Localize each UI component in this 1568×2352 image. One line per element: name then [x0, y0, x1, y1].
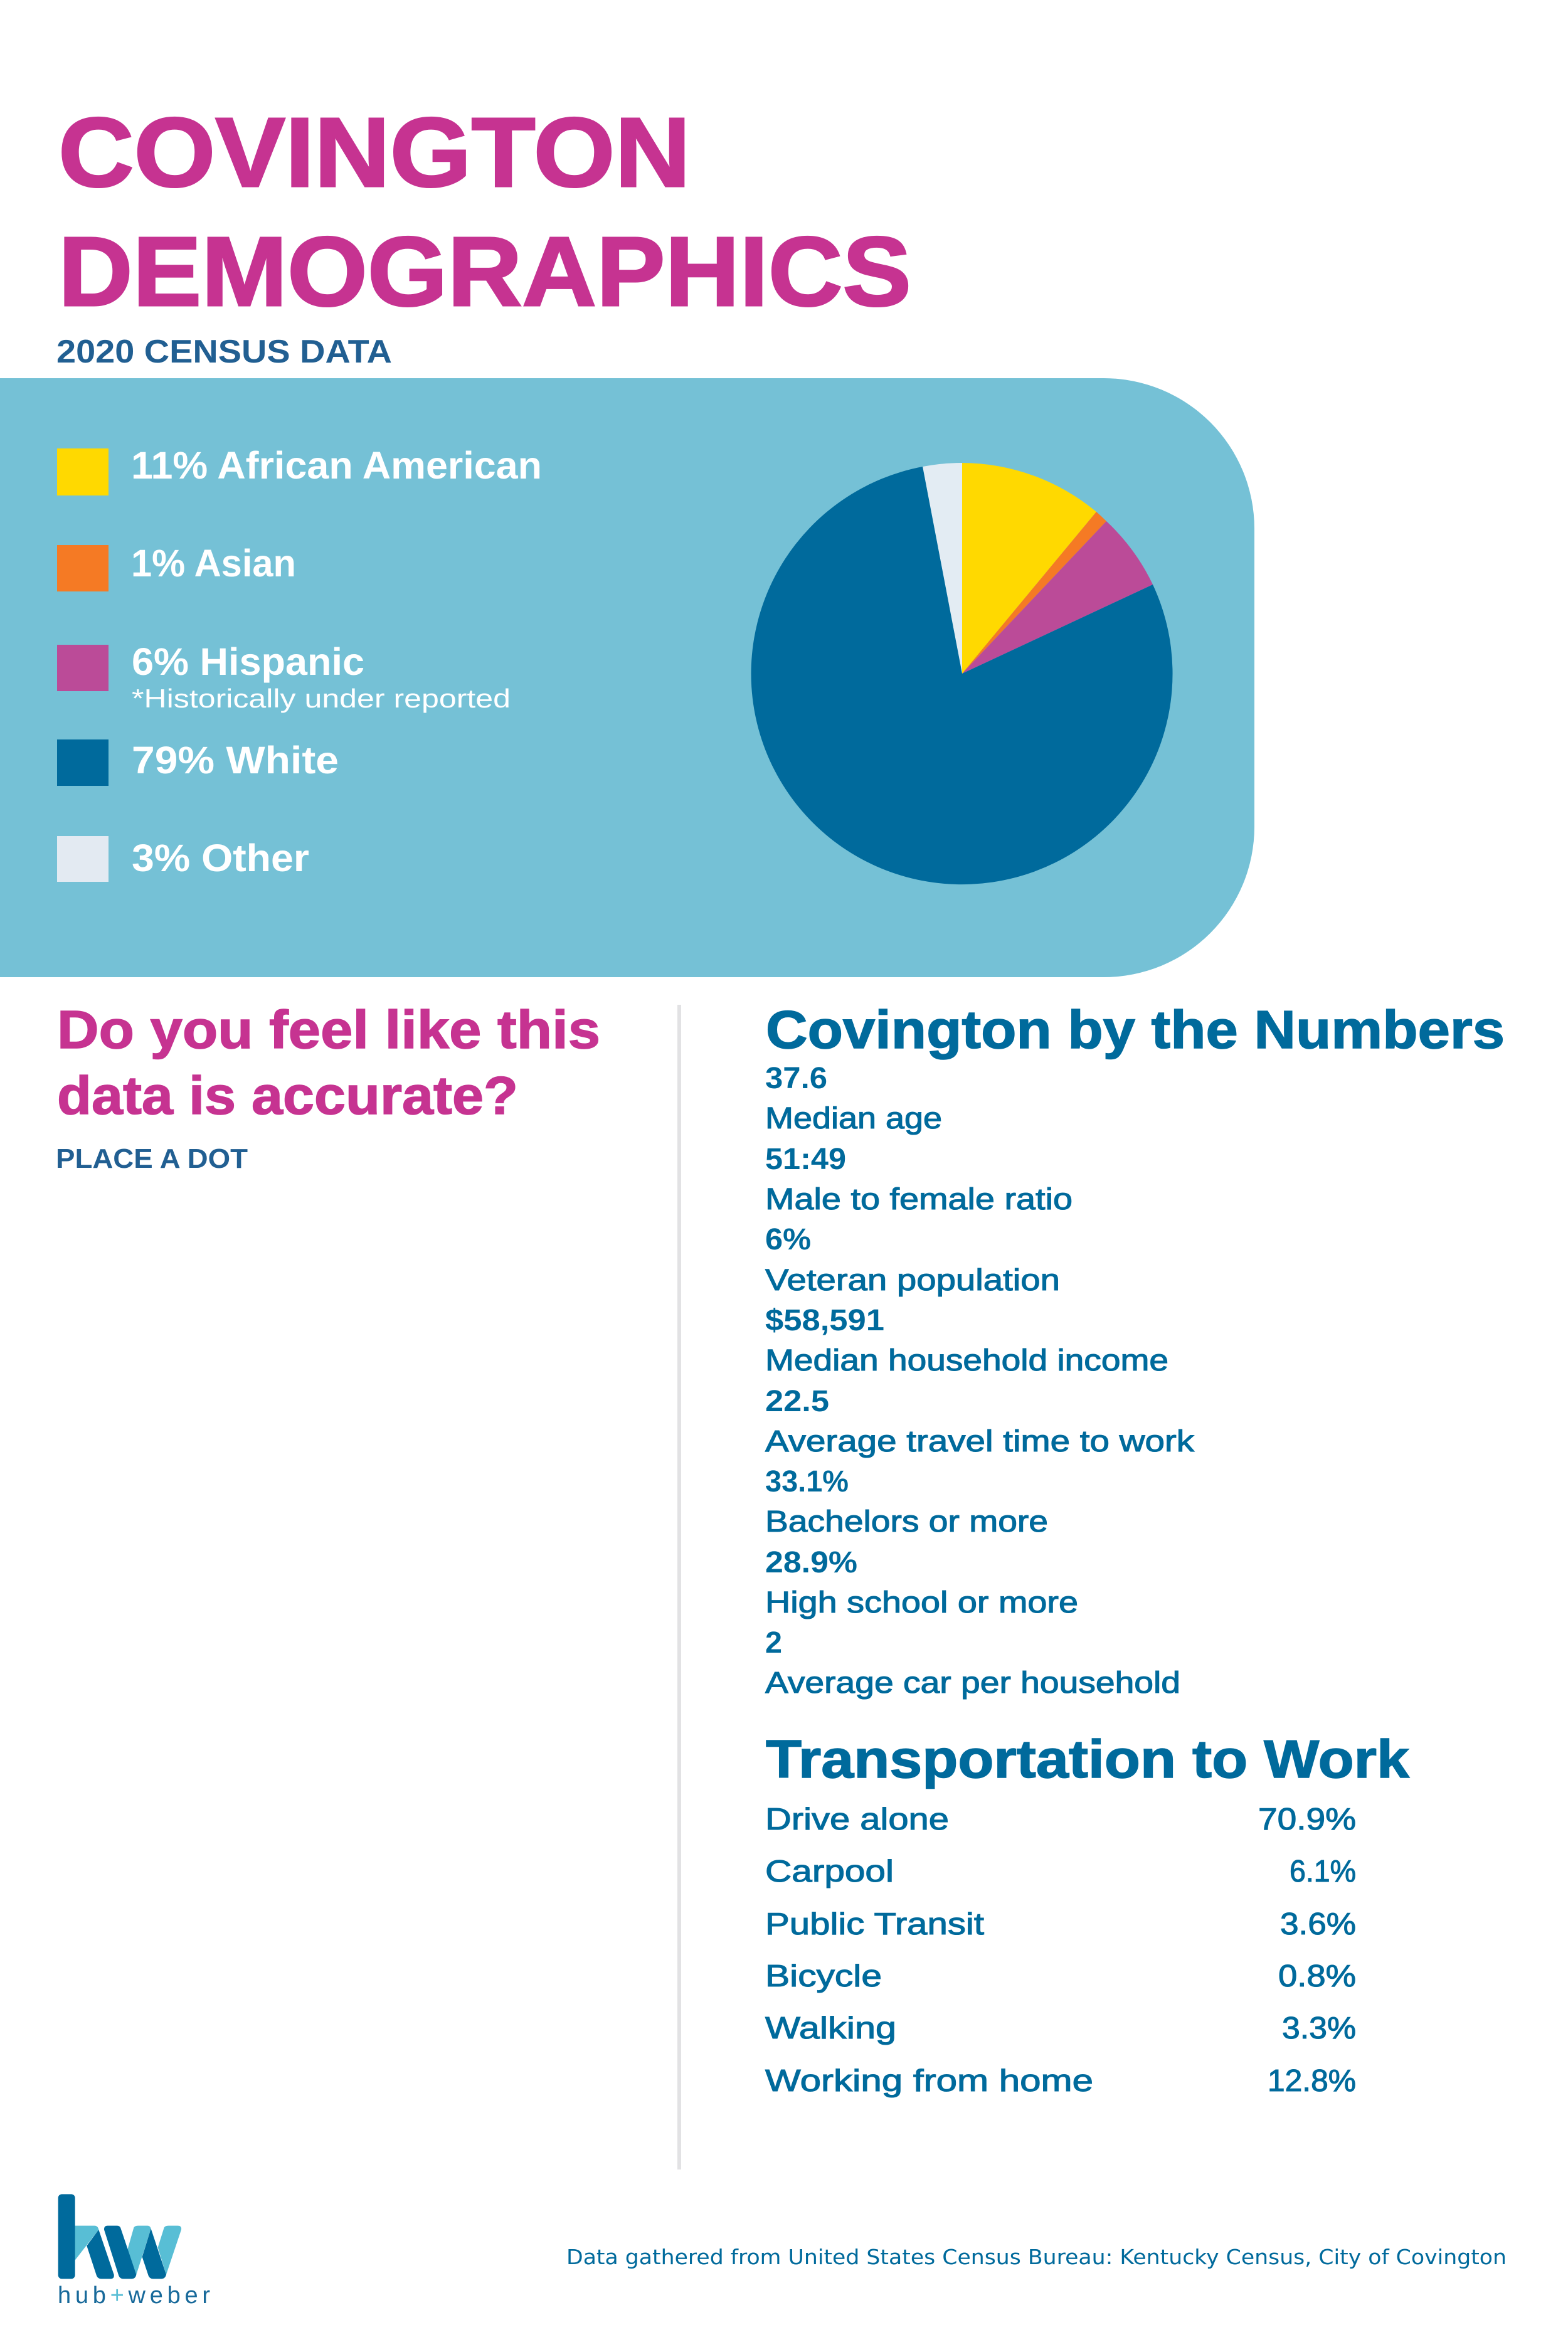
legend item: Asian: 1% Asian	[131, 542, 296, 585]
legend item: Hispanic: *Historically under reported	[132, 684, 511, 713]
legend item: Hispanic: 6% Hispanic	[132, 640, 364, 683]
legend item: Hispanic	[57, 640, 511, 713]
legend item: African American	[57, 444, 542, 495]
title: COVINGTON	[58, 98, 691, 208]
transportation table: Walking	[765, 2011, 896, 2045]
wordmark: hub+weber	[58, 2282, 210, 2309]
stats list: Veteran population	[765, 1264, 1060, 1297]
heading: accuracy question: Do you feel like this	[57, 1000, 600, 1060]
heading: accuracy question: data is accurate?	[57, 1066, 518, 1126]
stats list: $58,591	[765, 1304, 884, 1337]
legend item: White	[57, 739, 339, 786]
stats list: Bachelors or more	[765, 1505, 1048, 1539]
transportation table	[765, 1803, 1356, 2098]
legend item: Other: 3% Other	[132, 837, 309, 879]
stats list	[765, 1062, 1195, 1700]
transportation table: Drive alone	[765, 1803, 949, 1836]
stats list: Average car per household	[765, 1666, 1180, 1700]
transportation table: 3.6%	[1280, 1907, 1356, 1941]
title: DEMOGRAPHICS	[58, 217, 911, 327]
transportation table: 0.8%	[1278, 1959, 1356, 1993]
pie chart	[751, 463, 1173, 884]
title	[58, 98, 911, 327]
transportation table: Carpool	[765, 1855, 894, 1888]
transportation table: 12.8%	[1268, 2064, 1356, 2098]
stats list: 33.1%	[765, 1465, 849, 1498]
transportation table: Working from home	[765, 2064, 1093, 2098]
panel: ethnicity breakdown	[0, 378, 1254, 977]
heading: Transportation to Work: Transportation to Work	[766, 1730, 1410, 1789]
stats list: High school or more	[765, 1586, 1078, 1619]
legend item: Other	[57, 836, 309, 882]
stats list: 2	[765, 1626, 782, 1660]
stats list: Average travel time to work	[765, 1425, 1195, 1458]
legend item: White: 79% White	[132, 739, 339, 781]
legend item: Asian	[57, 542, 296, 591]
stats list: Median age	[765, 1102, 942, 1135]
transportation table: Public Transit	[765, 1907, 984, 1941]
transportation table: 6.1%	[1290, 1855, 1356, 1888]
logo: hub+weber	[58, 2194, 210, 2309]
transportation table: 3.3%	[1282, 2011, 1356, 2045]
stats list: 37.6	[765, 1062, 827, 1095]
stats list: 22.5	[765, 1385, 829, 1418]
stats list: 28.9%	[765, 1546, 857, 1579]
subtitle: 2020 CENSUS DATA	[56, 334, 392, 370]
legend item: African American: 11% African American	[131, 444, 542, 487]
instruction: place a dot: PLACE A DOT	[56, 1143, 248, 1174]
transportation table: 70.9%	[1258, 1803, 1356, 1836]
icon: kw mark	[58, 2194, 181, 2279]
stats list: 51:49	[765, 1143, 846, 1176]
stats list: Median household income	[765, 1344, 1168, 1377]
heading: accuracy question	[57, 1000, 600, 1126]
legend	[57, 444, 542, 882]
heading: Covington by the Numbers: Covington by the Numbers	[766, 1000, 1505, 1060]
footer source note: Data gathered from United States Census Bureau: Kentucky Census, City of Covington	[566, 2245, 1507, 2269]
stats list: 6%	[765, 1223, 811, 1256]
transportation table: Bicycle	[765, 1959, 882, 1993]
stats list: Male to female ratio	[765, 1183, 1073, 1216]
